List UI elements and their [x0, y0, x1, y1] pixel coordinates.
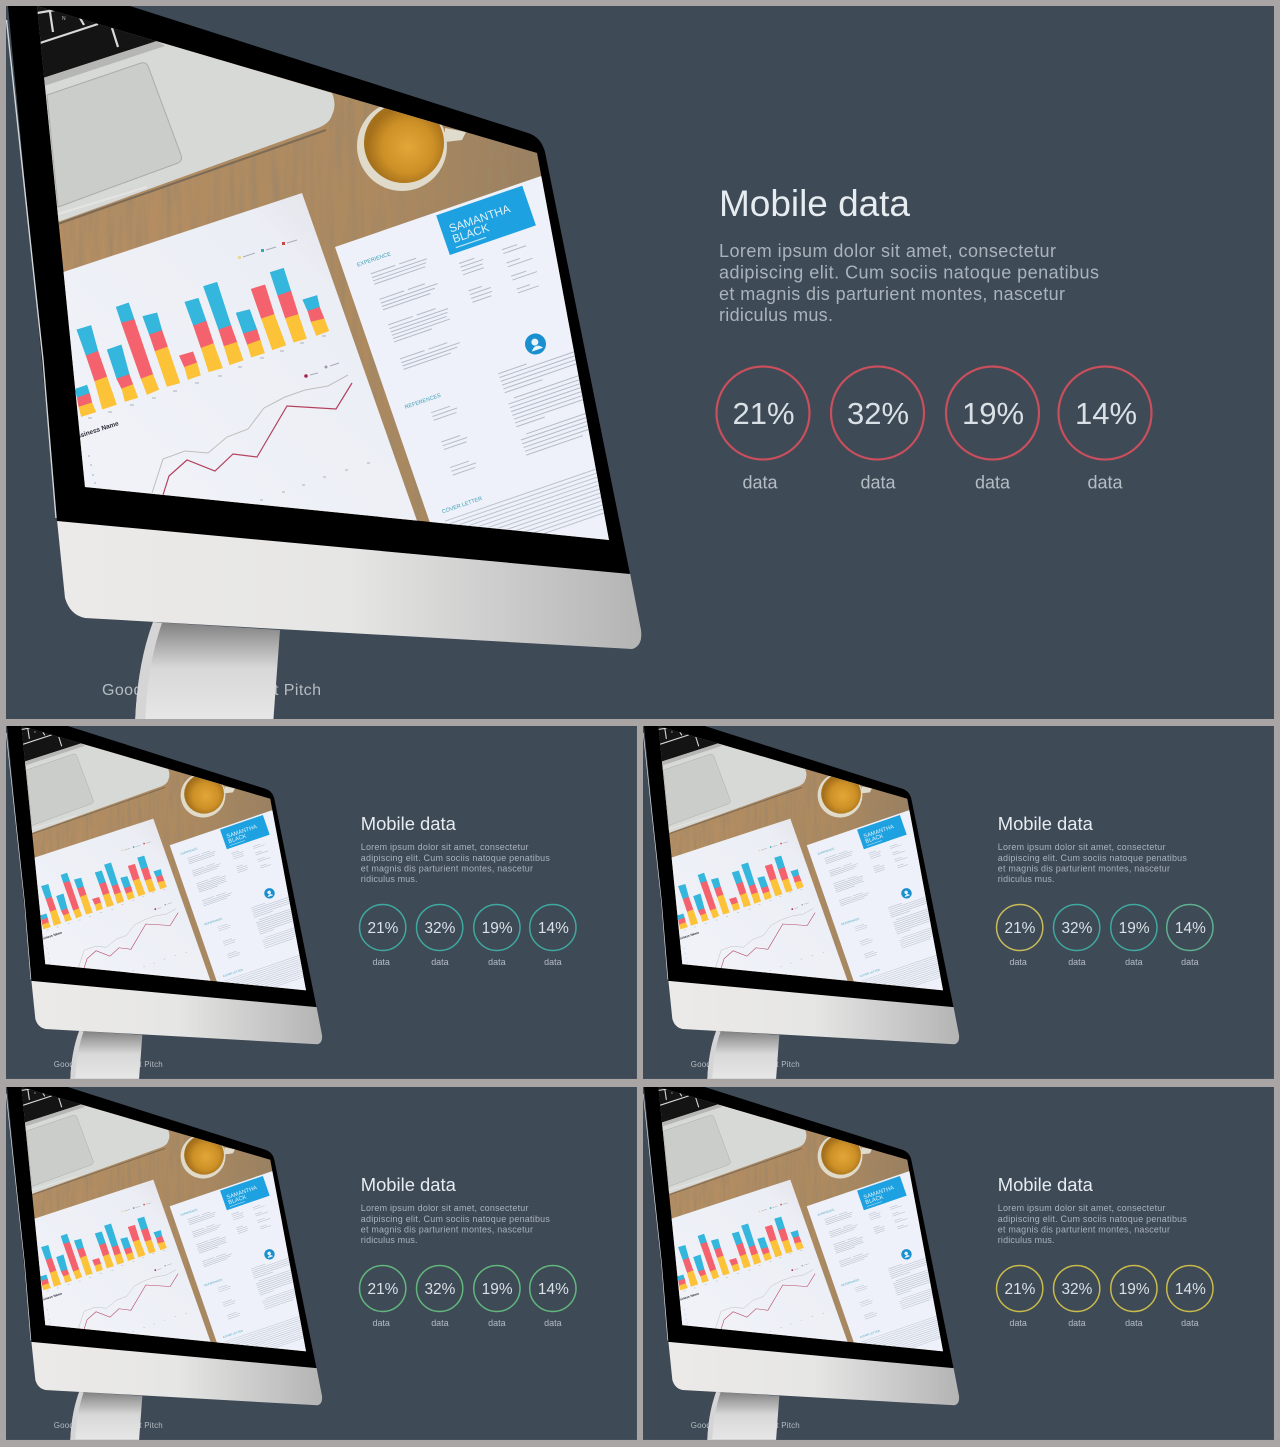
- stat circles: [997, 904, 1213, 967]
- footer text: Good Business Product Pitch: [102, 682, 321, 699]
- stat circles: 21%: [368, 920, 399, 937]
- stat circles: 14%: [538, 1281, 569, 1298]
- panel: small slide with green circles: [6, 1084, 637, 1443]
- body text: ridiculus mus.: [361, 874, 418, 884]
- body text: ridiculus mus.: [361, 1235, 418, 1245]
- stat circles: 21%: [368, 1281, 399, 1298]
- body text: [998, 1203, 1187, 1245]
- panel: small slide with teal circles: [6, 723, 637, 1082]
- resume contact columns: [459, 240, 542, 308]
- stat circles: data: [1068, 957, 1086, 967]
- monitor mockup: [643, 1084, 972, 1443]
- stat circles: 32%: [847, 396, 909, 431]
- coffee cup: [357, 101, 466, 191]
- stat circles: data: [372, 957, 390, 967]
- heading: Mobile data: [998, 1174, 1094, 1195]
- resume left column: EXPERIENCE: [356, 251, 392, 269]
- laptop: [40, 41, 334, 224]
- stat circles: data: [372, 1318, 390, 1328]
- stat circles: [360, 1265, 576, 1328]
- keyboard: [30, 0, 160, 80]
- body text: Lorem ipsum dolor sit amet, consectetur: [719, 241, 1056, 261]
- stat circles: [997, 1265, 1213, 1328]
- body text: [998, 842, 1187, 884]
- body text: et magnis dis parturient montes, nascetur: [719, 284, 1065, 304]
- panel: large slide with red circles: [6, 0, 1274, 725]
- stat circles: 19%: [962, 396, 1024, 431]
- footer text: Good Business Product Pitch: [691, 1060, 800, 1069]
- stat circles: 19%: [482, 1281, 513, 1298]
- stat circles: 14%: [1075, 396, 1137, 431]
- stat circles: 32%: [424, 920, 456, 937]
- stat circles: 14%: [538, 920, 569, 937]
- icon: avatar: [522, 331, 549, 357]
- stat circles: 19%: [1119, 920, 1150, 937]
- heading: Mobile data: [998, 813, 1094, 834]
- body text: et magnis dis parturient montes, nascetur: [361, 863, 533, 873]
- body text: ridiculus mus.: [998, 1235, 1055, 1245]
- body text: et magnis dis parturient montes, nascetur: [998, 1224, 1170, 1234]
- stat circles: 21%: [1005, 1281, 1036, 1298]
- stat circles: 32%: [424, 1281, 456, 1298]
- monitor mockup: [6, 0, 667, 725]
- stat circles: data: [431, 1318, 449, 1328]
- footer text: Good Business Product Pitch: [691, 1421, 800, 1430]
- body text: [719, 241, 1099, 325]
- body text: et magnis dis parturient montes, nascetur: [361, 1224, 533, 1234]
- line chart: Business Name: [71, 420, 120, 442]
- stat circles: 14%: [1175, 1281, 1206, 1298]
- stat circles: data: [1181, 1318, 1199, 1328]
- resume left column: COVER LETTER: [441, 496, 483, 515]
- resume left column: REFERENCES: [404, 393, 442, 411]
- resume header: BLACK: [451, 222, 491, 246]
- footer text: Good Business Product Pitch: [54, 1060, 163, 1069]
- stat circles: data: [544, 1318, 562, 1328]
- panel: small slide with yellow and teal circles: [643, 723, 1274, 1082]
- stat circles: 21%: [732, 396, 795, 431]
- body text: adipiscing elit. Cum sociis natoque penatibus: [361, 853, 550, 863]
- body text: adipiscing elit. Cum sociis natoque penatibus: [998, 1214, 1187, 1224]
- panel: small slide with yellow circles: [643, 1084, 1274, 1443]
- body text: Lorem ipsum dolor sit amet, consectetur: [998, 842, 1165, 852]
- stat circles: data: [1125, 957, 1143, 967]
- keyboard: N: [62, 16, 66, 22]
- stat circles: data: [488, 957, 506, 967]
- heading: Mobile data: [361, 813, 457, 834]
- monitor mockup: [643, 723, 972, 1082]
- stat circles: data: [975, 472, 1011, 492]
- chart paper: [30, 193, 422, 560]
- stat circles: data: [742, 472, 778, 492]
- body text: [361, 1203, 550, 1245]
- monitor chin: [57, 520, 641, 649]
- body text: Lorem ipsum dolor sit amet, consectetur: [361, 1203, 528, 1213]
- stat circles: 19%: [482, 920, 513, 937]
- stat circles: data: [544, 957, 562, 967]
- stat circles: data: [1181, 957, 1199, 967]
- body text: ridiculus mus.: [998, 874, 1055, 884]
- body text: adipiscing elit. Cum sociis natoque penatibus: [998, 853, 1187, 863]
- screen photo: [30, 0, 667, 606]
- resume left column: [355, 196, 653, 563]
- stat circles: data: [860, 472, 896, 492]
- body text: Lorem ipsum dolor sit amet, consectetur: [361, 842, 528, 852]
- resume paper: [335, 175, 667, 606]
- heading: Mobile data: [361, 1174, 457, 1195]
- stat circles: data: [1087, 472, 1123, 492]
- stacked bar chart: [76, 269, 328, 416]
- stat circles: data: [488, 1318, 506, 1328]
- chart legend: [238, 240, 297, 259]
- wood grain: [30, 0, 630, 560]
- line chart: [71, 363, 370, 500]
- stat circles: data: [1009, 957, 1027, 967]
- monitor stand: [135, 622, 280, 725]
- stat circles: [360, 904, 576, 967]
- stat circles: 14%: [1175, 920, 1206, 937]
- stat circles: 19%: [1119, 1281, 1150, 1298]
- resume right text: [498, 345, 608, 455]
- stat circles: data: [1068, 1318, 1086, 1328]
- body text: et magnis dis parturient montes, nascetur: [998, 863, 1170, 873]
- stat circles: [716, 366, 1152, 492]
- heading: Mobile data: [719, 183, 910, 224]
- stat circles: data: [1125, 1318, 1143, 1328]
- monitor mockup: [6, 723, 335, 1082]
- body text: ridiculus mus.: [719, 305, 833, 325]
- bar axis ticks: [88, 336, 326, 418]
- stat circles: data: [1009, 1318, 1027, 1328]
- footer text: Good Business Product Pitch: [54, 1421, 163, 1430]
- stat circles: data: [431, 957, 449, 967]
- stat circles: 32%: [1061, 1281, 1093, 1298]
- monitor bezel: [8, 6, 630, 574]
- monitor mockup: [6, 1084, 335, 1443]
- body text: adipiscing elit. Cum sociis natoque penatibus: [361, 1214, 550, 1224]
- body text: Lorem ipsum dolor sit amet, consectetur: [998, 1203, 1165, 1213]
- resume header: [436, 186, 536, 255]
- resume header: SAMANTHA: [448, 203, 512, 235]
- stat circles: 21%: [1005, 920, 1036, 937]
- stat circles: 32%: [1061, 920, 1093, 937]
- body text: adipiscing elit. Cum sociis natoque penatibus: [719, 262, 1099, 282]
- body text: [361, 842, 550, 884]
